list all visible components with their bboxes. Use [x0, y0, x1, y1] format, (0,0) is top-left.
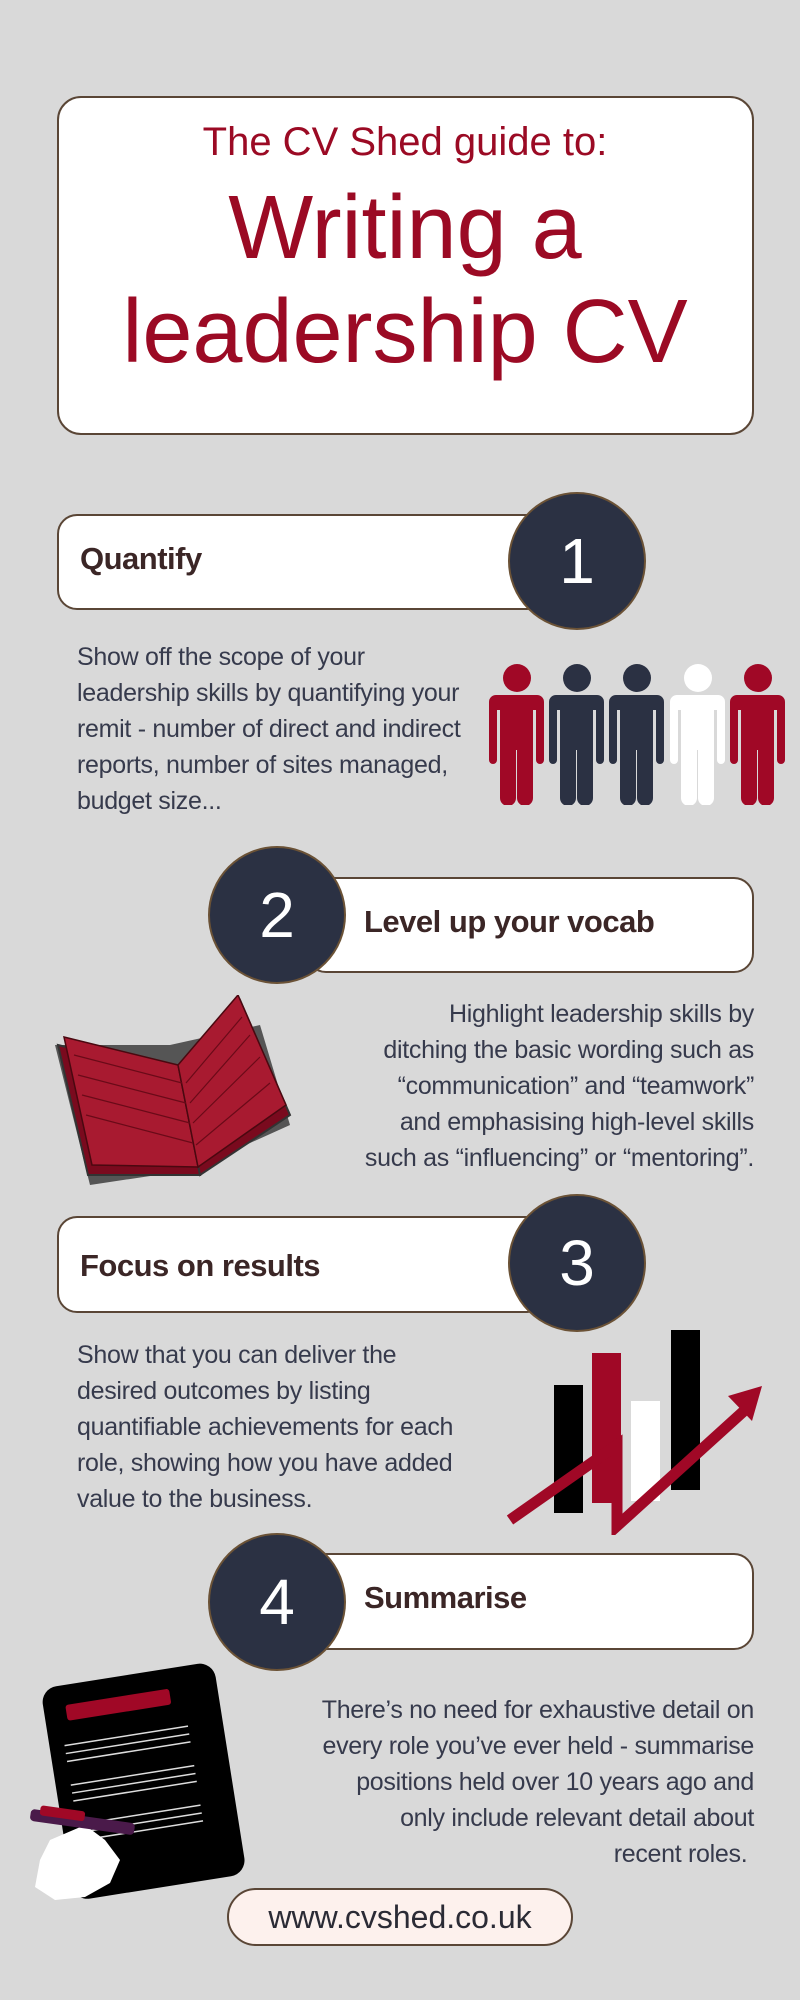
- step 3 heading: Focus on results: [80, 1248, 320, 1283]
- step 2 text: Highlight leadership skills by: [449, 1000, 754, 1028]
- step 4 text: [322, 1696, 754, 1868]
- step 1 text: Show off the scope of your: [77, 643, 365, 671]
- step 1 text: remit - number of direct and indirect: [77, 715, 461, 743]
- step 1 heading box: [57, 514, 547, 610]
- step 3 number circle: 3: [559, 1227, 595, 1299]
- step 1 number circle: [508, 492, 646, 630]
- step 4 text: positions held over 10 years ago and: [356, 1768, 754, 1796]
- step 2 text: ditching the basic wording such as: [383, 1036, 754, 1064]
- step 4 text: recent roles.: [614, 1840, 747, 1868]
- main title: leadership CV: [122, 282, 688, 382]
- step 2 number circle: [208, 846, 346, 984]
- step 3 text: role, showing how you have added: [77, 1449, 452, 1477]
- step 3 number circle: [508, 1194, 646, 1332]
- step 4 text: There’s no need for exhaustive detail on: [322, 1696, 754, 1724]
- website url pill: [227, 1888, 573, 1946]
- step 1 text: leadership skills by quantifying your: [77, 679, 459, 707]
- step 2 heading: Level up your vocab: [364, 904, 654, 939]
- website url pill: www.cvshed.co.uk: [268, 1899, 532, 1935]
- main title: Writing a: [228, 178, 582, 278]
- step 4 text: only include relevant detail about: [400, 1804, 754, 1832]
- step 1 text: [77, 643, 461, 815]
- step 3 text: quantifiable achievements for each: [77, 1413, 453, 1441]
- title panel: [57, 96, 754, 435]
- step 4 number circle: 4: [259, 1566, 295, 1638]
- step 2 text: and emphasising high-level skills: [400, 1108, 754, 1136]
- icon: book: [55, 995, 292, 1185]
- step 4 heading box: [306, 1553, 754, 1650]
- icon: document and hand: [30, 1664, 244, 1900]
- step 2 text: such as “influencing” or “mentoring”.: [365, 1144, 754, 1172]
- step 2 number circle: 2: [259, 879, 295, 951]
- subtitle: The CV Shed guide to:: [203, 120, 607, 164]
- step 1 number circle: 1: [559, 525, 595, 597]
- step 1 text: reports, number of sites managed,: [77, 751, 448, 779]
- step 3 text: Show that you can deliver the: [77, 1341, 396, 1369]
- icon: growth chart: [506, 1330, 762, 1535]
- step 2 heading box: [306, 877, 754, 973]
- step 2 text: “communication” and “teamwork”: [398, 1072, 754, 1100]
- step 4 text: every role you’ve ever held - summarise: [322, 1732, 754, 1760]
- main title: [122, 178, 688, 382]
- step 3 text: [77, 1341, 453, 1513]
- step 1 heading: Quantify: [80, 541, 202, 576]
- step 2 text: [365, 1000, 754, 1172]
- step 4 number circle: [208, 1533, 346, 1671]
- step 3 heading box: [57, 1216, 547, 1313]
- step 4 heading: Summarise: [364, 1580, 527, 1615]
- step 3 text: value to the business.: [77, 1485, 312, 1513]
- icon: people: [489, 664, 785, 805]
- step 1 text: budget size...: [77, 787, 222, 815]
- step 3 text: desired outcomes by listing: [77, 1377, 370, 1405]
